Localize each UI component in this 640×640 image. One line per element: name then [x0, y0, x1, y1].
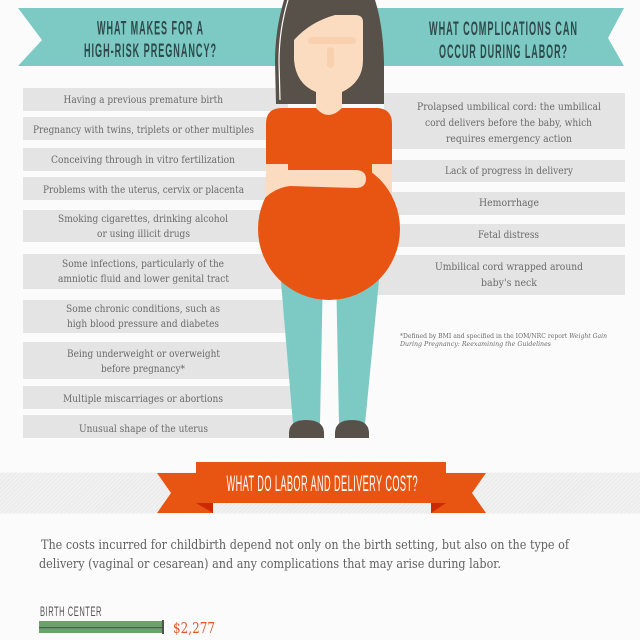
banner: labor complications heading	[370, 8, 624, 66]
forearm	[265, 170, 366, 198]
risk: weight: before pregnancy*	[101, 363, 186, 375]
risk: uterus problems: Problems with the uterus, cervix or placenta	[43, 184, 244, 196]
legs	[280, 270, 380, 424]
risk: in vitro	[23, 148, 288, 171]
nose	[327, 47, 334, 68]
panel: risk factor list	[23, 88, 295, 438]
risk: uterus shape	[23, 415, 295, 438]
complication: cord wrapped	[370, 255, 625, 295]
risk: miscarriages: Multiple miscarriages or abortions	[63, 393, 223, 405]
risk: smoking: or using illicit drugs	[97, 228, 190, 240]
risk: infections: Some infections, particularly of the	[62, 258, 224, 270]
risk: infections	[23, 254, 288, 289]
banner: high-risk pregnancy heading: WHAT MAKES FOR A	[97, 18, 204, 40]
risk: weight: Being underweight or overweight	[67, 348, 221, 360]
risk: uterus shape: Unusual shape of the uterus	[79, 423, 208, 435]
face and neck	[294, 15, 363, 115]
complication: hemorrhage: Hemorrhage	[479, 197, 539, 209]
intro paragraph: delivery (vaginal or cesarean) and any complications that may arise during labor.	[39, 557, 501, 572]
complication: prolapsed cord: requires emergency action	[446, 133, 572, 145]
complication: lack of progress	[385, 160, 625, 182]
risk: multiples: Pregnancy with twins, triplets or other multiples	[33, 124, 254, 136]
footnote	[399, 332, 607, 348]
risk: uterus problems	[23, 177, 288, 200]
risk: smoking	[23, 210, 288, 242]
upper arm skin	[266, 164, 392, 210]
bar	[39, 620, 164, 634]
shoes	[289, 420, 369, 438]
risk: multiples	[23, 117, 288, 140]
risk: infections: amniotic fluid and lower genital tract	[58, 273, 230, 285]
banner: labor and delivery cost	[157, 462, 486, 513]
illustration: pregnant woman	[258, 0, 400, 438]
panel: complications list	[370, 93, 625, 295]
complication: cord wrapped: Umbilical cord wrapped around	[435, 261, 583, 273]
footnote: During Pregnancy: Reexamining the Guidelines	[399, 340, 552, 348]
complication: fetal distress: Fetal distress	[478, 229, 539, 241]
complication: prolapsed cord: Prolapsed umbilical cord: the umbilical	[417, 101, 602, 113]
bar label: BIRTH CENTER	[40, 603, 102, 619]
risk: premature birth	[23, 88, 288, 111]
complication: fetal distress	[385, 224, 625, 247]
hair	[275, 0, 384, 104]
risk: in vitro: Conceiving through in vitro fertilization	[51, 154, 235, 166]
risk: smoking: Smoking cigarettes, drinking alcohol	[58, 213, 229, 225]
complication: cord wrapped: baby's neck	[481, 277, 538, 289]
complication: hemorrhage	[385, 192, 625, 215]
dress torso	[266, 108, 392, 215]
intro paragraph: The costs incurred for childbirth depend not only on the birth setting, but also on the type of	[41, 538, 570, 553]
intro paragraph	[39, 538, 570, 572]
bar chart: birth center cost	[39, 603, 215, 637]
complication: prolapsed cord	[384, 93, 625, 149]
belly	[258, 158, 400, 300]
hatched band	[0, 472, 640, 514]
bar value: $2,277	[173, 619, 215, 637]
footnote: *Defined by BMI and specified in the IOM/NRC report Weight Gain	[400, 332, 607, 340]
risk: chronic conditions: high blood pressure and diabetes	[67, 318, 219, 330]
risk: chronic conditions: Some chronic conditions, such as	[66, 303, 220, 315]
risk: weight	[23, 342, 293, 379]
eyebrows	[308, 37, 356, 44]
complication: prolapsed cord: cord delivers before the baby, which	[425, 117, 592, 129]
risk: miscarriages	[23, 386, 295, 409]
complication: lack of progress: Lack of progress in delivery	[445, 165, 573, 177]
risk: premature birth: Having a previous premature birth	[64, 94, 223, 106]
banner: high-risk pregnancy heading	[18, 8, 290, 66]
risk: chronic conditions	[23, 300, 288, 333]
banner: high-risk pregnancy heading: HIGH-RISK PREGNANCY?	[84, 41, 217, 62]
